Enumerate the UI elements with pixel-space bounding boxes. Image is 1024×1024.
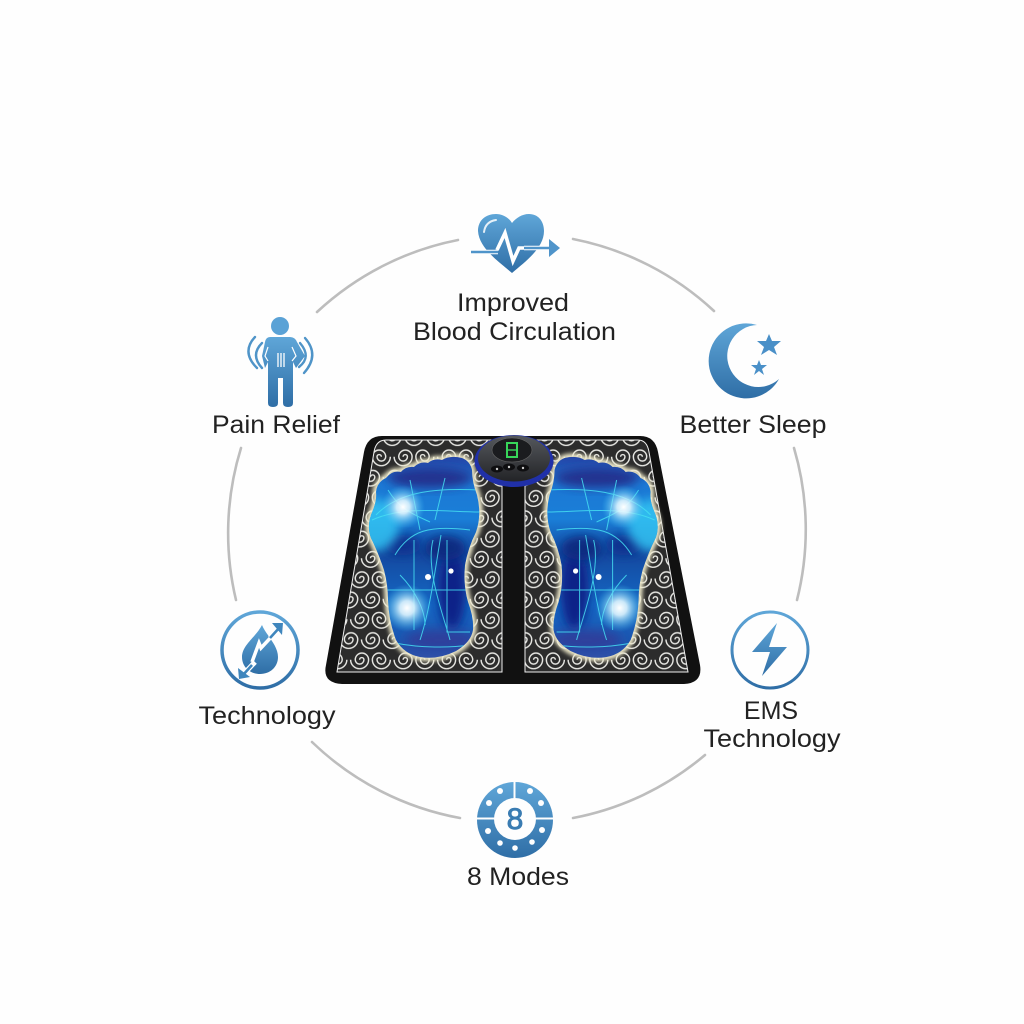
label: EMS Technology: EMS — [744, 697, 798, 725]
buttons — [491, 464, 529, 472]
label: Pain Relief: Pain Relief — [212, 411, 340, 439]
label: EMS Technology: Technology — [704, 725, 841, 753]
label: 8 Modes: 8 Modes — [467, 863, 569, 891]
mat base — [325, 436, 700, 684]
icon: 8 modes dial: 8 — [507, 803, 523, 836]
heading: Improved Blood Circulation — [413, 289, 616, 346]
icon: lightning bolt in circle — [732, 612, 808, 688]
circular connector ring — [228, 239, 806, 818]
control dial — [474, 435, 554, 487]
label: EMS Technology — [704, 697, 841, 753]
left textured panel — [337, 440, 502, 672]
icon: person with waves — [248, 317, 312, 407]
icon: crescent moon and stars — [709, 323, 781, 398]
right foot outline — [542, 450, 676, 665]
icon: heart with pulse — [471, 214, 560, 273]
heading: Improved Blood Circulation: Improved — [457, 289, 569, 317]
label: Better Sleep: Better Sleep — [680, 411, 826, 439]
product: foot massager mat — [325, 435, 700, 684]
right textured panel — [525, 440, 688, 672]
icon: water drop with bolt and arrows — [222, 612, 298, 688]
label: Technology: Technology — [198, 702, 336, 730]
left foot outline — [351, 450, 485, 665]
digital display — [507, 443, 517, 457]
heading: Improved Blood Circulation: Blood Circulation — [413, 318, 616, 346]
icon: 8 modes dial — [477, 781, 553, 858]
